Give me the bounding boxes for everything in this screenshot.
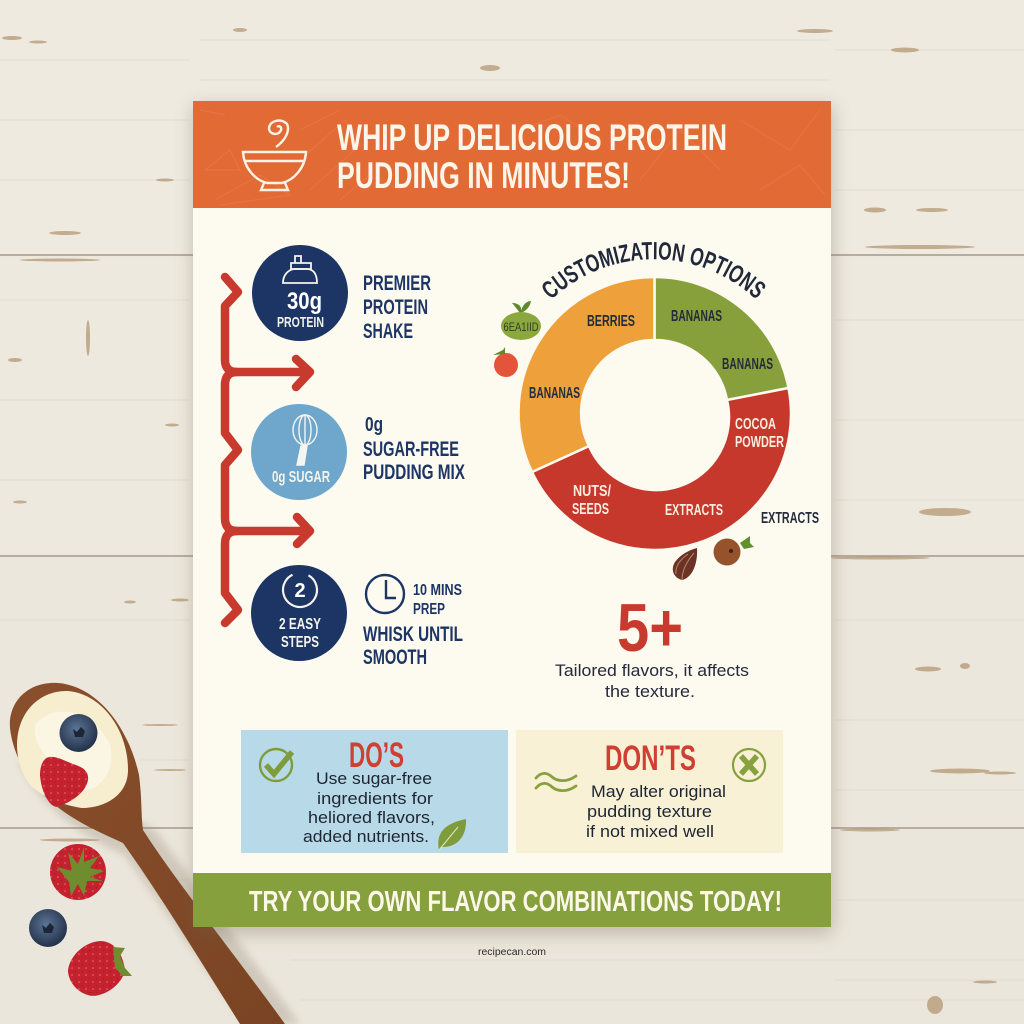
do's text: heliored flavors, [308, 808, 435, 827]
strawberry top view [50, 844, 106, 900]
poster card shadow [193, 106, 833, 934]
chart title: CUSTOMIZATION OPTIONS [542, 242, 766, 298]
step 1: protein shake [252, 245, 431, 343]
icon: timer ring: 2 [294, 580, 306, 602]
badge: 30g protein: 30g [287, 288, 322, 315]
panel: do's [241, 730, 508, 853]
spoon with yogurt and berries [10, 683, 300, 1024]
header banner [193, 101, 831, 208]
icon: x mark [733, 749, 765, 781]
step 2: sugar-free pudding mix [251, 404, 465, 500]
icon: leaf [438, 819, 466, 850]
badge: 30g protein [252, 245, 348, 341]
segment: orange [519, 277, 654, 472]
badge: 2 easy steps [251, 565, 347, 661]
icon: shaker [283, 256, 317, 283]
segment: green [654, 277, 788, 400]
label: whisk until smooth [363, 623, 463, 669]
badge: 2 easy steps: STEPS [281, 634, 319, 651]
label: sugar-free pudding mix: 0g [365, 414, 383, 436]
title [337, 117, 727, 196]
badge: 0g sugar: 0g SUGAR [272, 469, 330, 486]
title: PUDDING IN MINUTES! [337, 155, 630, 196]
footer banner: TRY YOUR OWN FLAVOR COMBINATIONS TODAY! [249, 886, 782, 918]
label: premier protein shake [363, 272, 431, 343]
title: WHIP UP DELICIOUS PROTEIN [337, 117, 727, 158]
stat: 5+ tailored flavors: 5+ [617, 590, 683, 666]
label: 10 mins prep: 10 MINS [413, 582, 462, 599]
donut labels [529, 308, 819, 527]
poster card [193, 101, 831, 927]
donut labels on red: SEEDS [572, 501, 609, 518]
stat: 5+ tailored flavors: the texture. [605, 682, 695, 701]
donut chart [519, 277, 791, 550]
label: whisk until smooth: SMOOTH [363, 646, 427, 669]
donut labels: BERRIES [587, 313, 635, 330]
label: sugar-free pudding mix: SUGAR-FREE [363, 438, 459, 461]
label: premier protein shake: PREMIER [363, 272, 431, 295]
icon: tomato [493, 347, 518, 377]
label: 10 mins prep: PREP [413, 601, 445, 618]
stat: 5+ tailored flavors [555, 590, 749, 701]
strawberry on yogurt [40, 757, 88, 807]
donut labels on red: COCOA [735, 416, 776, 433]
icon: nut [714, 536, 754, 566]
spoon shadow [18, 760, 300, 1024]
do's text: ingredients for [317, 789, 433, 808]
donut labels on red: EXTRACTS [665, 502, 723, 519]
yogurt [17, 691, 128, 808]
donut labels: BANANAS [671, 308, 722, 325]
don'ts text [586, 782, 726, 841]
step 3: whisk until smooth [251, 565, 463, 669]
icon: bowl with steam [243, 121, 306, 190]
strawberries and blueberries on table [29, 844, 132, 996]
don'ts text: May alter original [591, 782, 726, 801]
icon: cocoa pod [673, 548, 697, 580]
icon: clock [366, 575, 404, 613]
segment: red [532, 388, 791, 550]
icon: check [260, 749, 292, 781]
donut labels: BANANAS [529, 385, 580, 402]
blueberry on yogurt [60, 714, 98, 752]
label: sugar-free pudding mix: PUDDING MIX [363, 461, 465, 484]
donut labels: EXTRACTS [761, 510, 819, 527]
donut labels: BANANAS [722, 356, 773, 373]
icon: waves [536, 773, 576, 791]
footer banner [193, 873, 831, 927]
label: premier protein shake: SHAKE [363, 320, 413, 343]
label: 10 mins prep [413, 582, 462, 618]
heading: do's: DO’S [349, 736, 404, 775]
badge: 2 easy steps: 2 EASY [279, 616, 321, 633]
badge: 30g protein: PROTEIN [277, 314, 324, 331]
spoon [10, 683, 285, 1024]
flow arrow [225, 277, 310, 623]
do's text: Use sugar-free [316, 769, 432, 788]
icon: green apple [501, 301, 541, 340]
label: premier protein shake: PROTEIN [363, 296, 428, 319]
icon: whisk [293, 415, 317, 465]
badge: 0g sugar [251, 404, 347, 500]
stat: 5+ tailored flavors: Tailored flavors, it affects [555, 661, 749, 680]
don'ts text: if not mixed well [586, 822, 714, 841]
donut labels on red: NUTS/ [573, 483, 611, 500]
heading: don'ts: DON’TS [605, 739, 696, 778]
donut labels on red [572, 416, 784, 519]
source credit: recipecan.com [478, 947, 546, 958]
donut labels on red: POWDER [735, 434, 784, 451]
do's text: added nutrients. [303, 827, 429, 846]
don'ts text: pudding texture [587, 802, 712, 821]
customization options chart [493, 242, 819, 580]
blueberry [29, 909, 67, 947]
icon: green apple: 6EA1IID [504, 320, 539, 334]
label: sugar-free pudding mix [363, 414, 465, 484]
do's text [303, 769, 435, 846]
panel: don'ts [516, 730, 783, 853]
strawberry side [68, 941, 132, 996]
label: whisk until smooth: WHISK UNTIL [363, 623, 463, 646]
